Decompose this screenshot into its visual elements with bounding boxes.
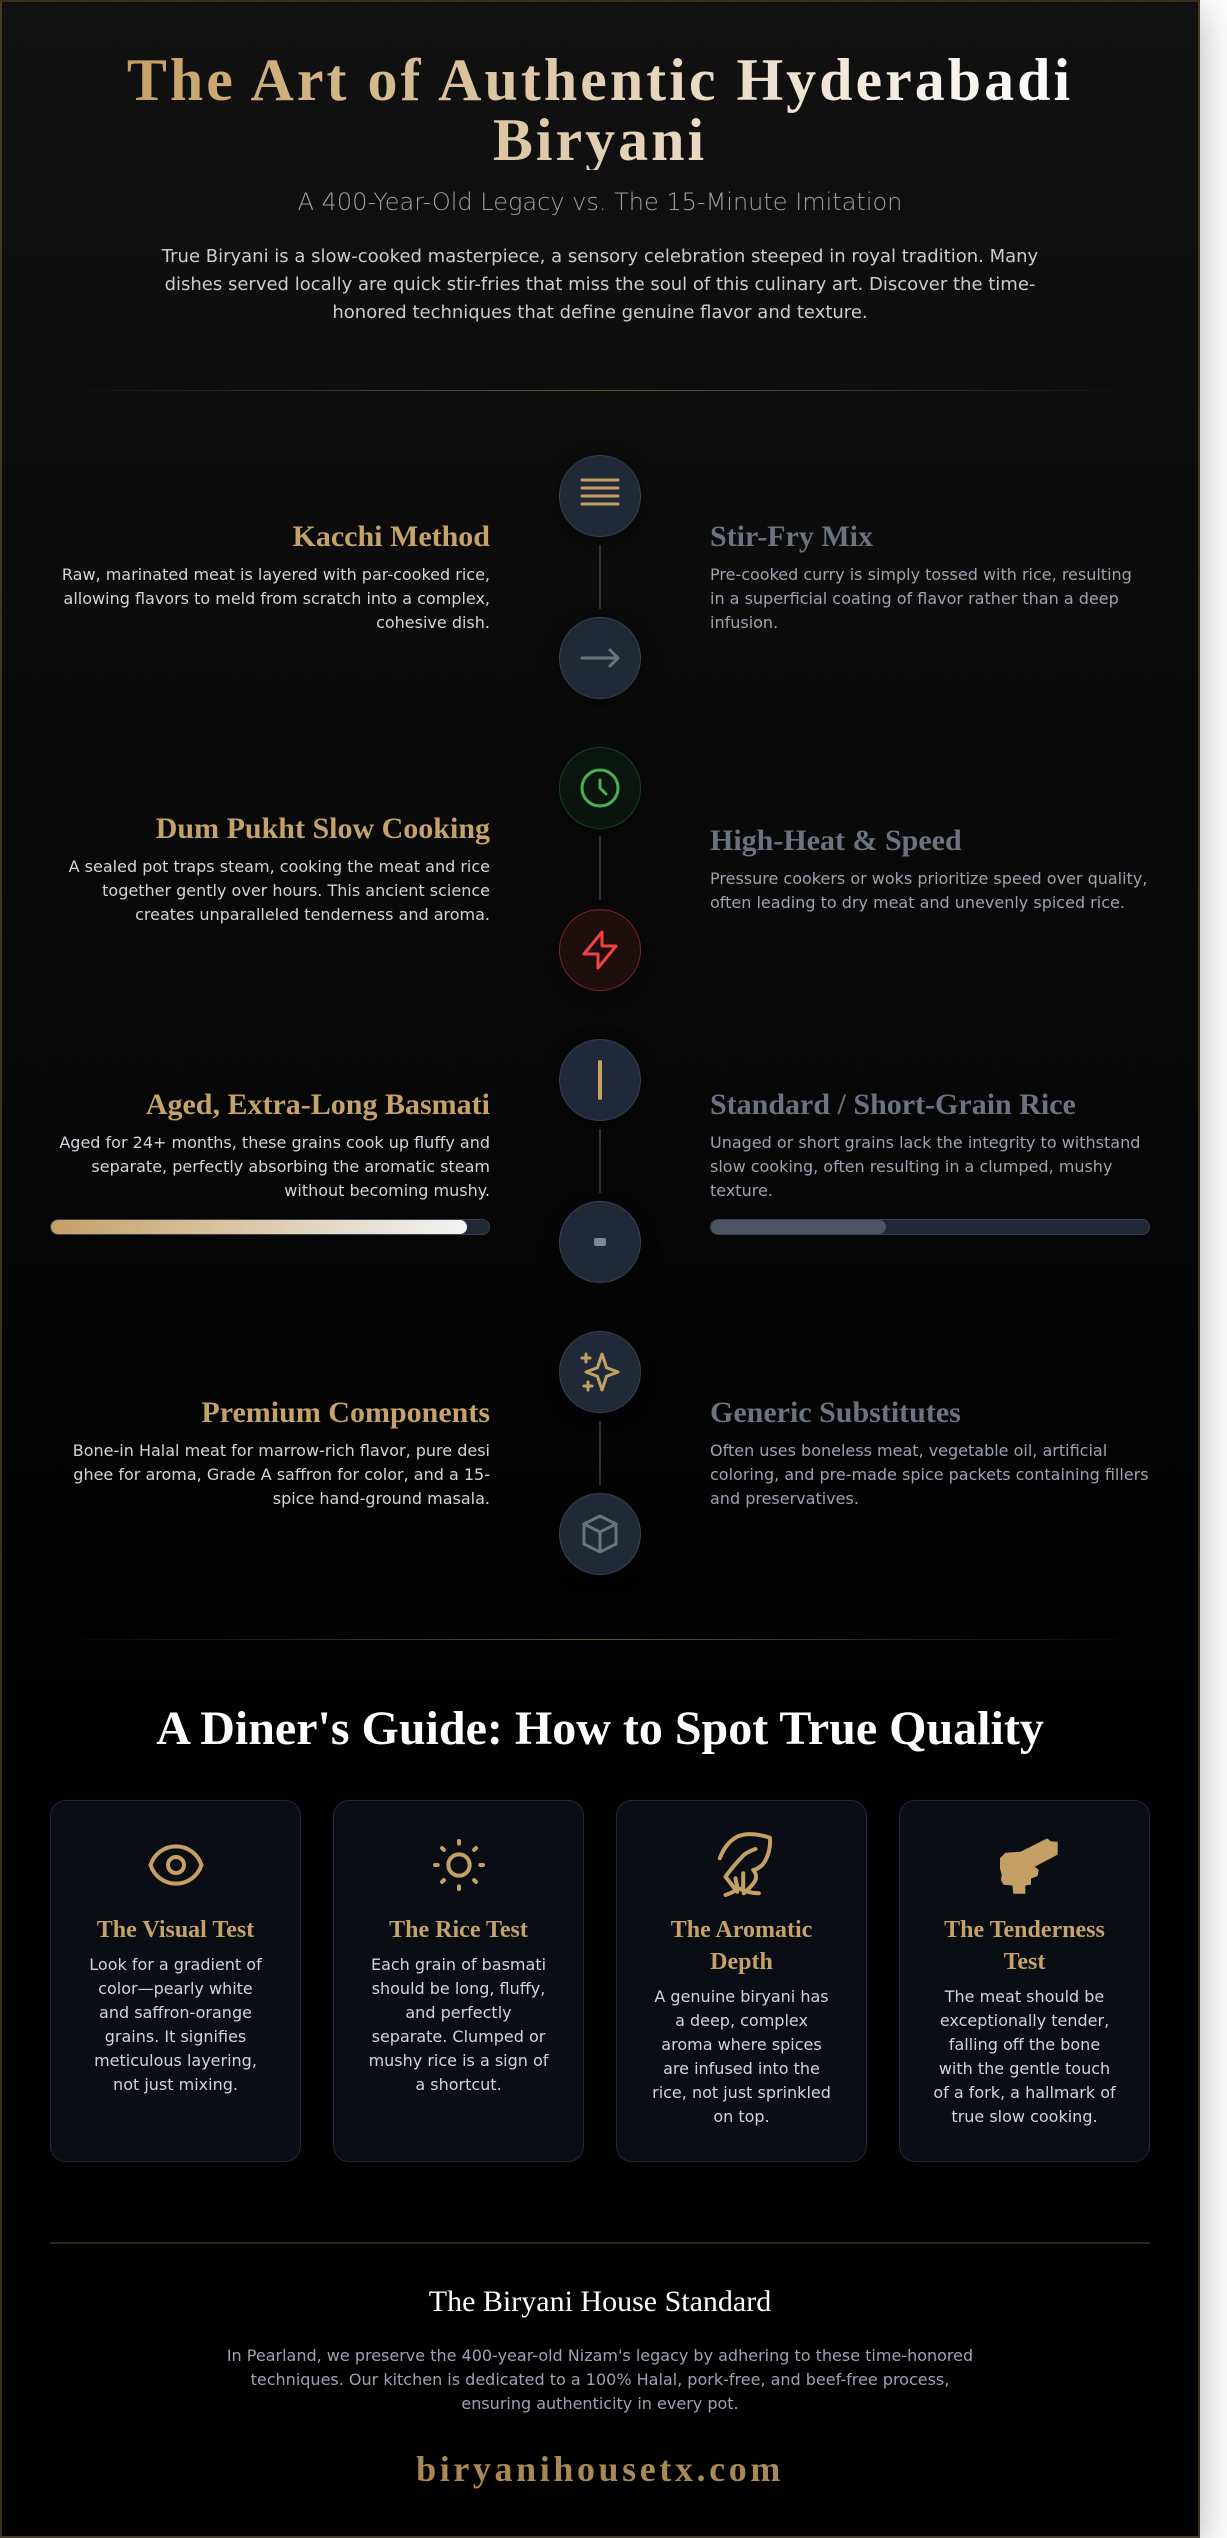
panel: Kacchi Method: Kacchi Method (293, 520, 490, 553)
intro text: dishes served locally are quick stir-fries that miss the soul of this culinary art. Discover the time- (165, 274, 1035, 294)
panel: Dum Pukht: A sealed pot traps steam, cooking the meat and rice (69, 857, 490, 876)
subtitle: A 400-Year-Old Legacy vs. The 15-Minute Imitation (298, 188, 902, 216)
icon: cube (559, 1493, 641, 1575)
card: tenderness test: falling off the bone (949, 2035, 1100, 2054)
icon: short grain (559, 1201, 641, 1283)
footer text: In Pearland, we preserve the 400-year-old Nizam's legacy by adhering to these time-honored (227, 2346, 973, 2365)
panel: Dum Pukht: creates unparalleled tenderness and aroma. (135, 905, 490, 924)
panel: Premium Components: spice hand-ground masala. (273, 1489, 490, 1508)
card: aromatic depth: on top. (713, 2107, 770, 2126)
icon: sun (433, 1839, 485, 1891)
panel: Aged Basmati (50, 1088, 490, 1235)
footer text: ensuring authenticity in every pot. (461, 2394, 739, 2413)
card: visual test: Look for a gradient of (89, 1955, 262, 1974)
card: rice test (333, 1800, 584, 2162)
panel: Short grain: slow cooking, often resulting in a clumped, mushy (710, 1157, 1112, 1176)
icon: clock (559, 747, 641, 829)
card: visual test: and saffron-orange (99, 2003, 252, 2022)
panel: Short grain: Standard / Short-Grain Rice (710, 1088, 1076, 1121)
title (50, 50, 1150, 170)
card: tenderness test: with the gentle touch (939, 2059, 1110, 2078)
card: tenderness test: true slow cooking. (951, 2107, 1098, 2126)
card: aromatic depth: Depth (710, 1949, 773, 1975)
intro text: honored techniques that define genuine flavor and texture. (332, 302, 868, 322)
card: visual test: The Visual Test (97, 1917, 254, 1943)
card: rice test: separate. Clumped or (372, 2027, 545, 2046)
card: aromatic depth: a deep, complex (675, 2011, 808, 2030)
card: visual test: color—pearly white (98, 1979, 253, 1998)
panel: High-Heat: Pressure cookers or woks prioritize speed over quality, (710, 869, 1147, 888)
panel: Aged Basmati: Aged, Extra-Long Basmati (146, 1088, 490, 1121)
panel: Aged Basmati: separate, perfectly absorbing the aromatic steam (91, 1157, 490, 1176)
title: Biryani (493, 107, 707, 173)
panel: Kacchi Method (62, 520, 490, 632)
panel: Dum Pukht (68, 812, 490, 924)
panel: Premium Components: Bone-in Halal meat for marrow-rich flavor, pure desi (73, 1441, 490, 1460)
panel: Stir-Fry Mix: Pre-cooked curry is simply tossed with rice, resulting (710, 565, 1132, 584)
card: visual test: meticulous layering, (94, 2051, 257, 2070)
panel: Generic Substitutes: Often uses boneless meat, vegetable oil, artificial (710, 1441, 1107, 1460)
panel: Generic Substitutes: coloring, and pre-made spice packets containing fillers (710, 1465, 1149, 1484)
icon: layers (559, 455, 641, 537)
card: tenderness test: exceptionally tender, (940, 2011, 1109, 2030)
icon: eye (148, 1844, 204, 1886)
icon: long grain (559, 1039, 641, 1121)
panel: Short grain (710, 1088, 1150, 1235)
icon: sparkles (559, 1331, 641, 1413)
card: rice test: Each grain of basmati (371, 1955, 546, 1974)
panel: Dum Pukht: together gently over hours. This ancient science (102, 881, 490, 900)
card: visual test: grains. It signifies (105, 2027, 246, 2046)
panel: Stir-Fry Mix (710, 520, 1132, 632)
panel: Kacchi Method: cohesive dish. (376, 613, 490, 632)
panel: Premium Components: ghee for aroma, Grade A saffron for color, and a 15- (73, 1465, 490, 1484)
card: aromatic depth (616, 1800, 867, 2162)
panel: Generic Substitutes (710, 1396, 1149, 1508)
card: tenderness test: The meat should be (945, 1987, 1104, 2006)
footer text (227, 2346, 973, 2413)
panel: High-Heat: High-Heat & Speed (710, 824, 962, 857)
footer heading: The Biryani House Standard (429, 2285, 771, 2318)
card: tenderness test (899, 1800, 1150, 2162)
icon: feather (718, 1832, 772, 1897)
card: rice test: mushy rice is a sign of (369, 2051, 548, 2070)
card: tenderness test: Test (1004, 1949, 1045, 1975)
icon: meat (1000, 1838, 1058, 1894)
card: visual test: not just mixing. (113, 2075, 238, 2094)
card: rice test: a shortcut. (415, 2075, 502, 2094)
footer website: biryanihousetx.com (416, 2448, 784, 2488)
intro text: True Biryani is a slow-cooked masterpiece, a sensory celebration steeped in royal tradition. Many (162, 246, 1038, 266)
card: visual test (50, 1800, 301, 2162)
panel: Kacchi Method: Raw, marinated meat is layered with par-cooked rice, (62, 565, 490, 584)
panel: Generic Substitutes: Generic Substitutes (710, 1396, 961, 1429)
panel: Stir-Fry Mix: infusion. (710, 613, 778, 632)
card: rice test: and perfectly (405, 2003, 512, 2022)
panel: Premium Components (73, 1396, 490, 1508)
panel: Stir-Fry Mix: Stir-Fry Mix (710, 520, 873, 553)
panel: Aged Basmati: without becoming mushy. (284, 1181, 490, 1200)
icon: arrow (559, 617, 641, 699)
card: aromatic depth: are infused into the (663, 2059, 820, 2078)
card: aromatic depth: aroma where spices (661, 2035, 822, 2054)
bar: long grain (50, 1219, 490, 1235)
panel: Generic Substitutes: and preservatives. (710, 1489, 859, 1508)
panel: Stir-Fry Mix: in a superficial coating of flavor rather than a deep (710, 589, 1119, 608)
icon: bolt (559, 909, 641, 991)
bar: short grain (710, 1219, 1150, 1235)
panel: Aged Basmati: Aged for 24+ months, these grains cook up fluffy and (59, 1133, 490, 1152)
card: aromatic depth: A genuine biryani has (654, 1987, 829, 2006)
card: rice test: The Rice Test (389, 1917, 528, 1943)
card: tenderness test: of a fork, a hallmark of (933, 2083, 1116, 2102)
intro text (162, 246, 1038, 322)
panel: Kacchi Method: allowing flavors to meld from scratch into a complex, (64, 589, 490, 608)
panel: Short grain: texture. (710, 1181, 773, 1200)
card: tenderness test: The Tenderness (944, 1917, 1105, 1943)
panel: Short grain: Unaged or short grains lack the integrity to withstand (710, 1133, 1140, 1152)
footer text: techniques. Our kitchen is dedicated to a 100% Halal, pork-free, and beef-free process, (251, 2370, 949, 2389)
section heading: A Diner's Guide: How to Spot True Quality (156, 1702, 1044, 1754)
panel: High-Heat (710, 824, 1147, 912)
panel: High-Heat: often leading to dry meat and unevenly spiced rice. (710, 893, 1125, 912)
card: rice test: should be long, fluffy, (372, 1979, 545, 1998)
card: aromatic depth: rice, not just sprinkled (652, 2083, 831, 2102)
title: The Art of Authentic Hyderabadi (127, 47, 1073, 113)
card: aromatic depth: The Aromatic (671, 1917, 812, 1943)
panel: Dum Pukht: Dum Pukht Slow Cooking (156, 812, 490, 845)
panel: Premium Components: Premium Components (201, 1396, 490, 1429)
